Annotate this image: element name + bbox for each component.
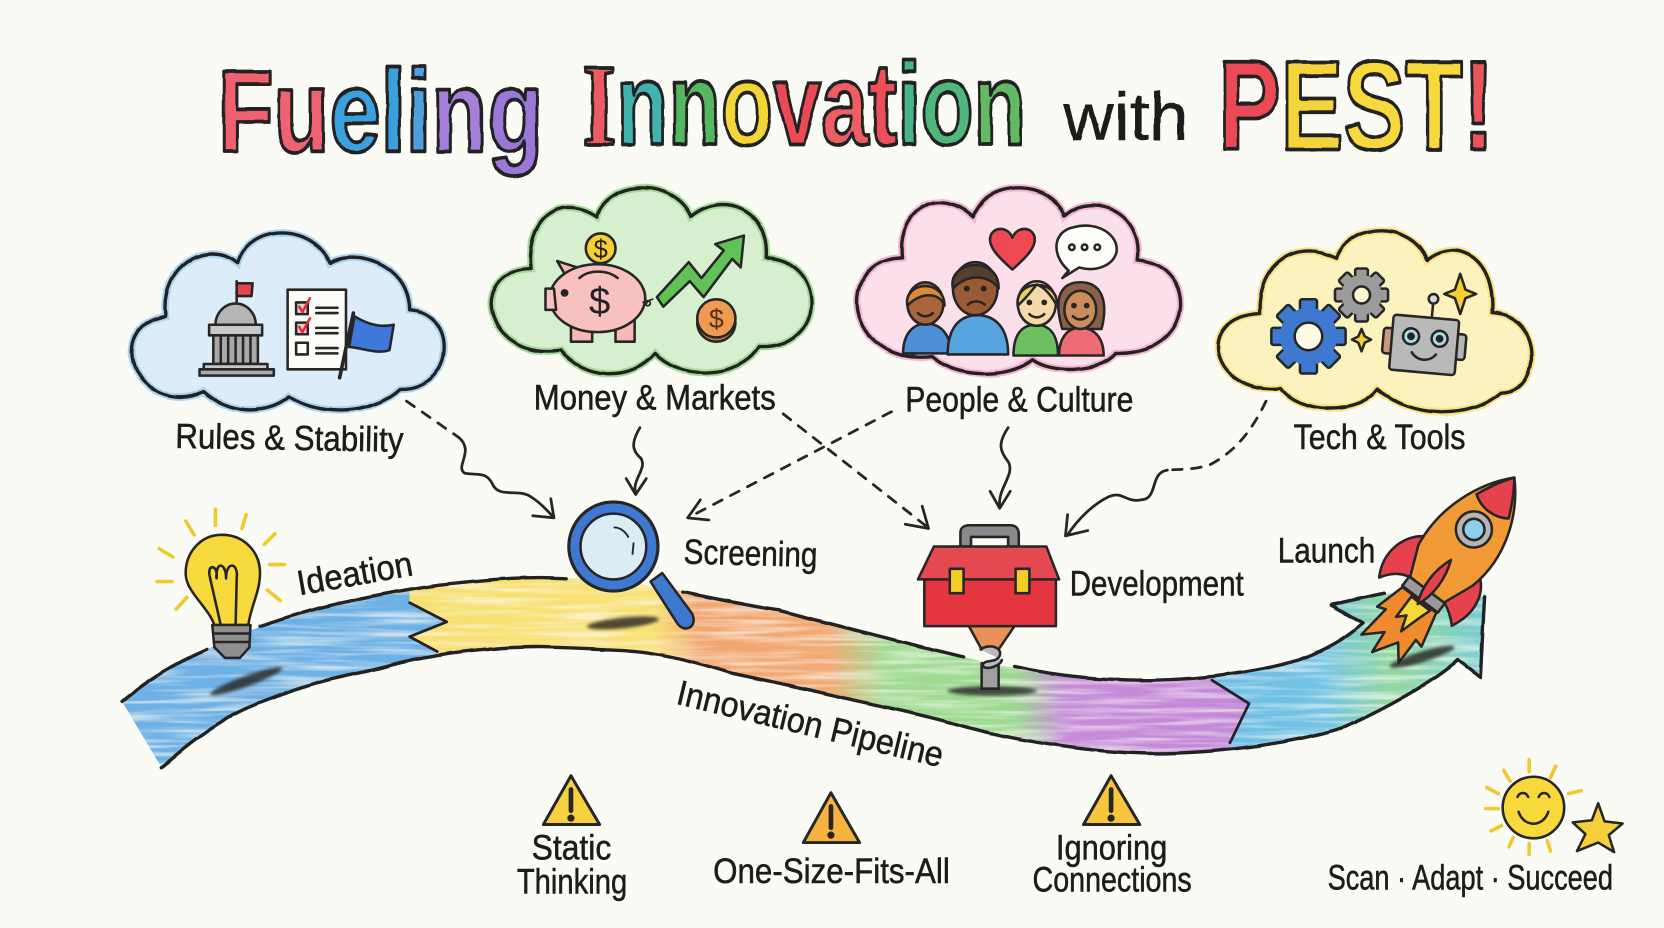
label: Development: Development: [1070, 564, 1244, 603]
ribbon outline: [122, 578, 1485, 767]
icon: blue gear: [1271, 299, 1346, 374]
label: Ignoring Connections: Ignoring: [1056, 829, 1167, 868]
icon: red heart: [990, 229, 1035, 270]
person 4: [1058, 282, 1104, 355]
label: Ignoring Connections: [1033, 829, 1192, 899]
title word: Fueling: Fueling: [218, 47, 543, 177]
pitfall: One-Size-Fits-All: [713, 793, 950, 891]
panel: Rules & Stability cloud: [132, 233, 444, 460]
label: Ignoring Connections: Connections: [1033, 860, 1192, 899]
pitfall: Ignoring Connections: [1033, 776, 1192, 899]
person 3: [1013, 281, 1058, 355]
label: Static Thinking: Thinking: [517, 863, 627, 902]
icon: toolbox: [918, 525, 1059, 689]
stage: Ideation: [157, 509, 416, 658]
label: Static Thinking: [517, 829, 627, 902]
arrow: People to Development: [990, 428, 1010, 508]
title word: PEST!: PEST!: [1218, 35, 1494, 177]
cloud shape: pink: [857, 188, 1181, 374]
stage: Screening: [569, 502, 818, 628]
icon: checklist: [288, 290, 346, 369]
panel: Money & Markets cloud: [491, 188, 811, 418]
label: Launch: Launch: [1278, 531, 1375, 570]
arrow: Money to Screening: [626, 428, 646, 495]
arrow: Money to Development: [783, 414, 929, 528]
icon: warning triangle: [543, 776, 600, 825]
icon: warning triangle: [1083, 776, 1140, 825]
title word: with: with: [1062, 80, 1189, 155]
stage: Launch: [1278, 445, 1551, 685]
cloud shape: green: [491, 188, 811, 374]
icon: gray gear: [1335, 268, 1388, 322]
icon: blue flag: [340, 313, 394, 378]
icon: smiling sun: [1486, 760, 1581, 854]
icon: sparkles: [1352, 274, 1476, 351]
arrow: Tech to Development: [1065, 401, 1266, 536]
icon: rising green arrow: [657, 236, 744, 307]
ribbon colour bands: [123, 578, 1483, 766]
title word: Innovation: Innovation: [583, 38, 1026, 171]
label: Innovation Pipeline: Innovation Pipeline: [673, 673, 947, 775]
title: [218, 35, 1494, 177]
label: People & Culture: People & Culture: [905, 381, 1133, 420]
label: One-Size-Fits-All: One-Size-Fits-All: [713, 852, 950, 891]
stage: Development: [918, 525, 1244, 689]
icon: piggy bank: $: [589, 280, 610, 323]
icon: warning triangle: [803, 793, 860, 843]
ribbon shadow smudges: [209, 614, 1456, 699]
cloud shape: yellow: [1218, 230, 1531, 412]
label: Tech & Tools: Tech & Tools: [1294, 418, 1466, 457]
icon: speech bubble: [1056, 226, 1117, 278]
icon: gold coin: $: [594, 236, 608, 264]
icon: robot: [1381, 290, 1470, 376]
label: Rules & Stability: Rules & Stability: [175, 417, 404, 460]
icon: copper coin: [697, 299, 735, 342]
closing: sun, star and motto: [1328, 760, 1623, 897]
label: Screening: Screening: [683, 532, 818, 575]
person 1: [903, 282, 951, 353]
icon: gold coin: [586, 233, 616, 264]
icon: rocket: [1335, 445, 1551, 685]
arrow: People to Screening: [688, 412, 891, 520]
pipeline ribbon: [120, 576, 1486, 770]
arrow: Rules to Screening: [406, 401, 554, 518]
label: Ideation: Ideation: [294, 545, 416, 603]
panel: Tech & Tools cloud: [1218, 230, 1531, 457]
pitfall: Static Thinking: [517, 776, 627, 902]
people group: [903, 262, 1104, 355]
icon: copper coin: $: [709, 304, 724, 334]
icon: piggy bank: [545, 261, 653, 342]
icon: government building: [200, 281, 274, 376]
icon: magnifying glass: [569, 502, 694, 628]
cloud shape: blue: [132, 233, 444, 410]
icon: star: [1573, 803, 1623, 852]
icon: light bulb: [157, 509, 284, 658]
person 2: [948, 262, 1008, 354]
label: Money & Markets: Money & Markets: [534, 379, 776, 418]
label: Static Thinking: Static: [532, 829, 611, 868]
panel: People & Culture cloud: [857, 188, 1181, 420]
ribbon segment joints: [410, 603, 1249, 743]
